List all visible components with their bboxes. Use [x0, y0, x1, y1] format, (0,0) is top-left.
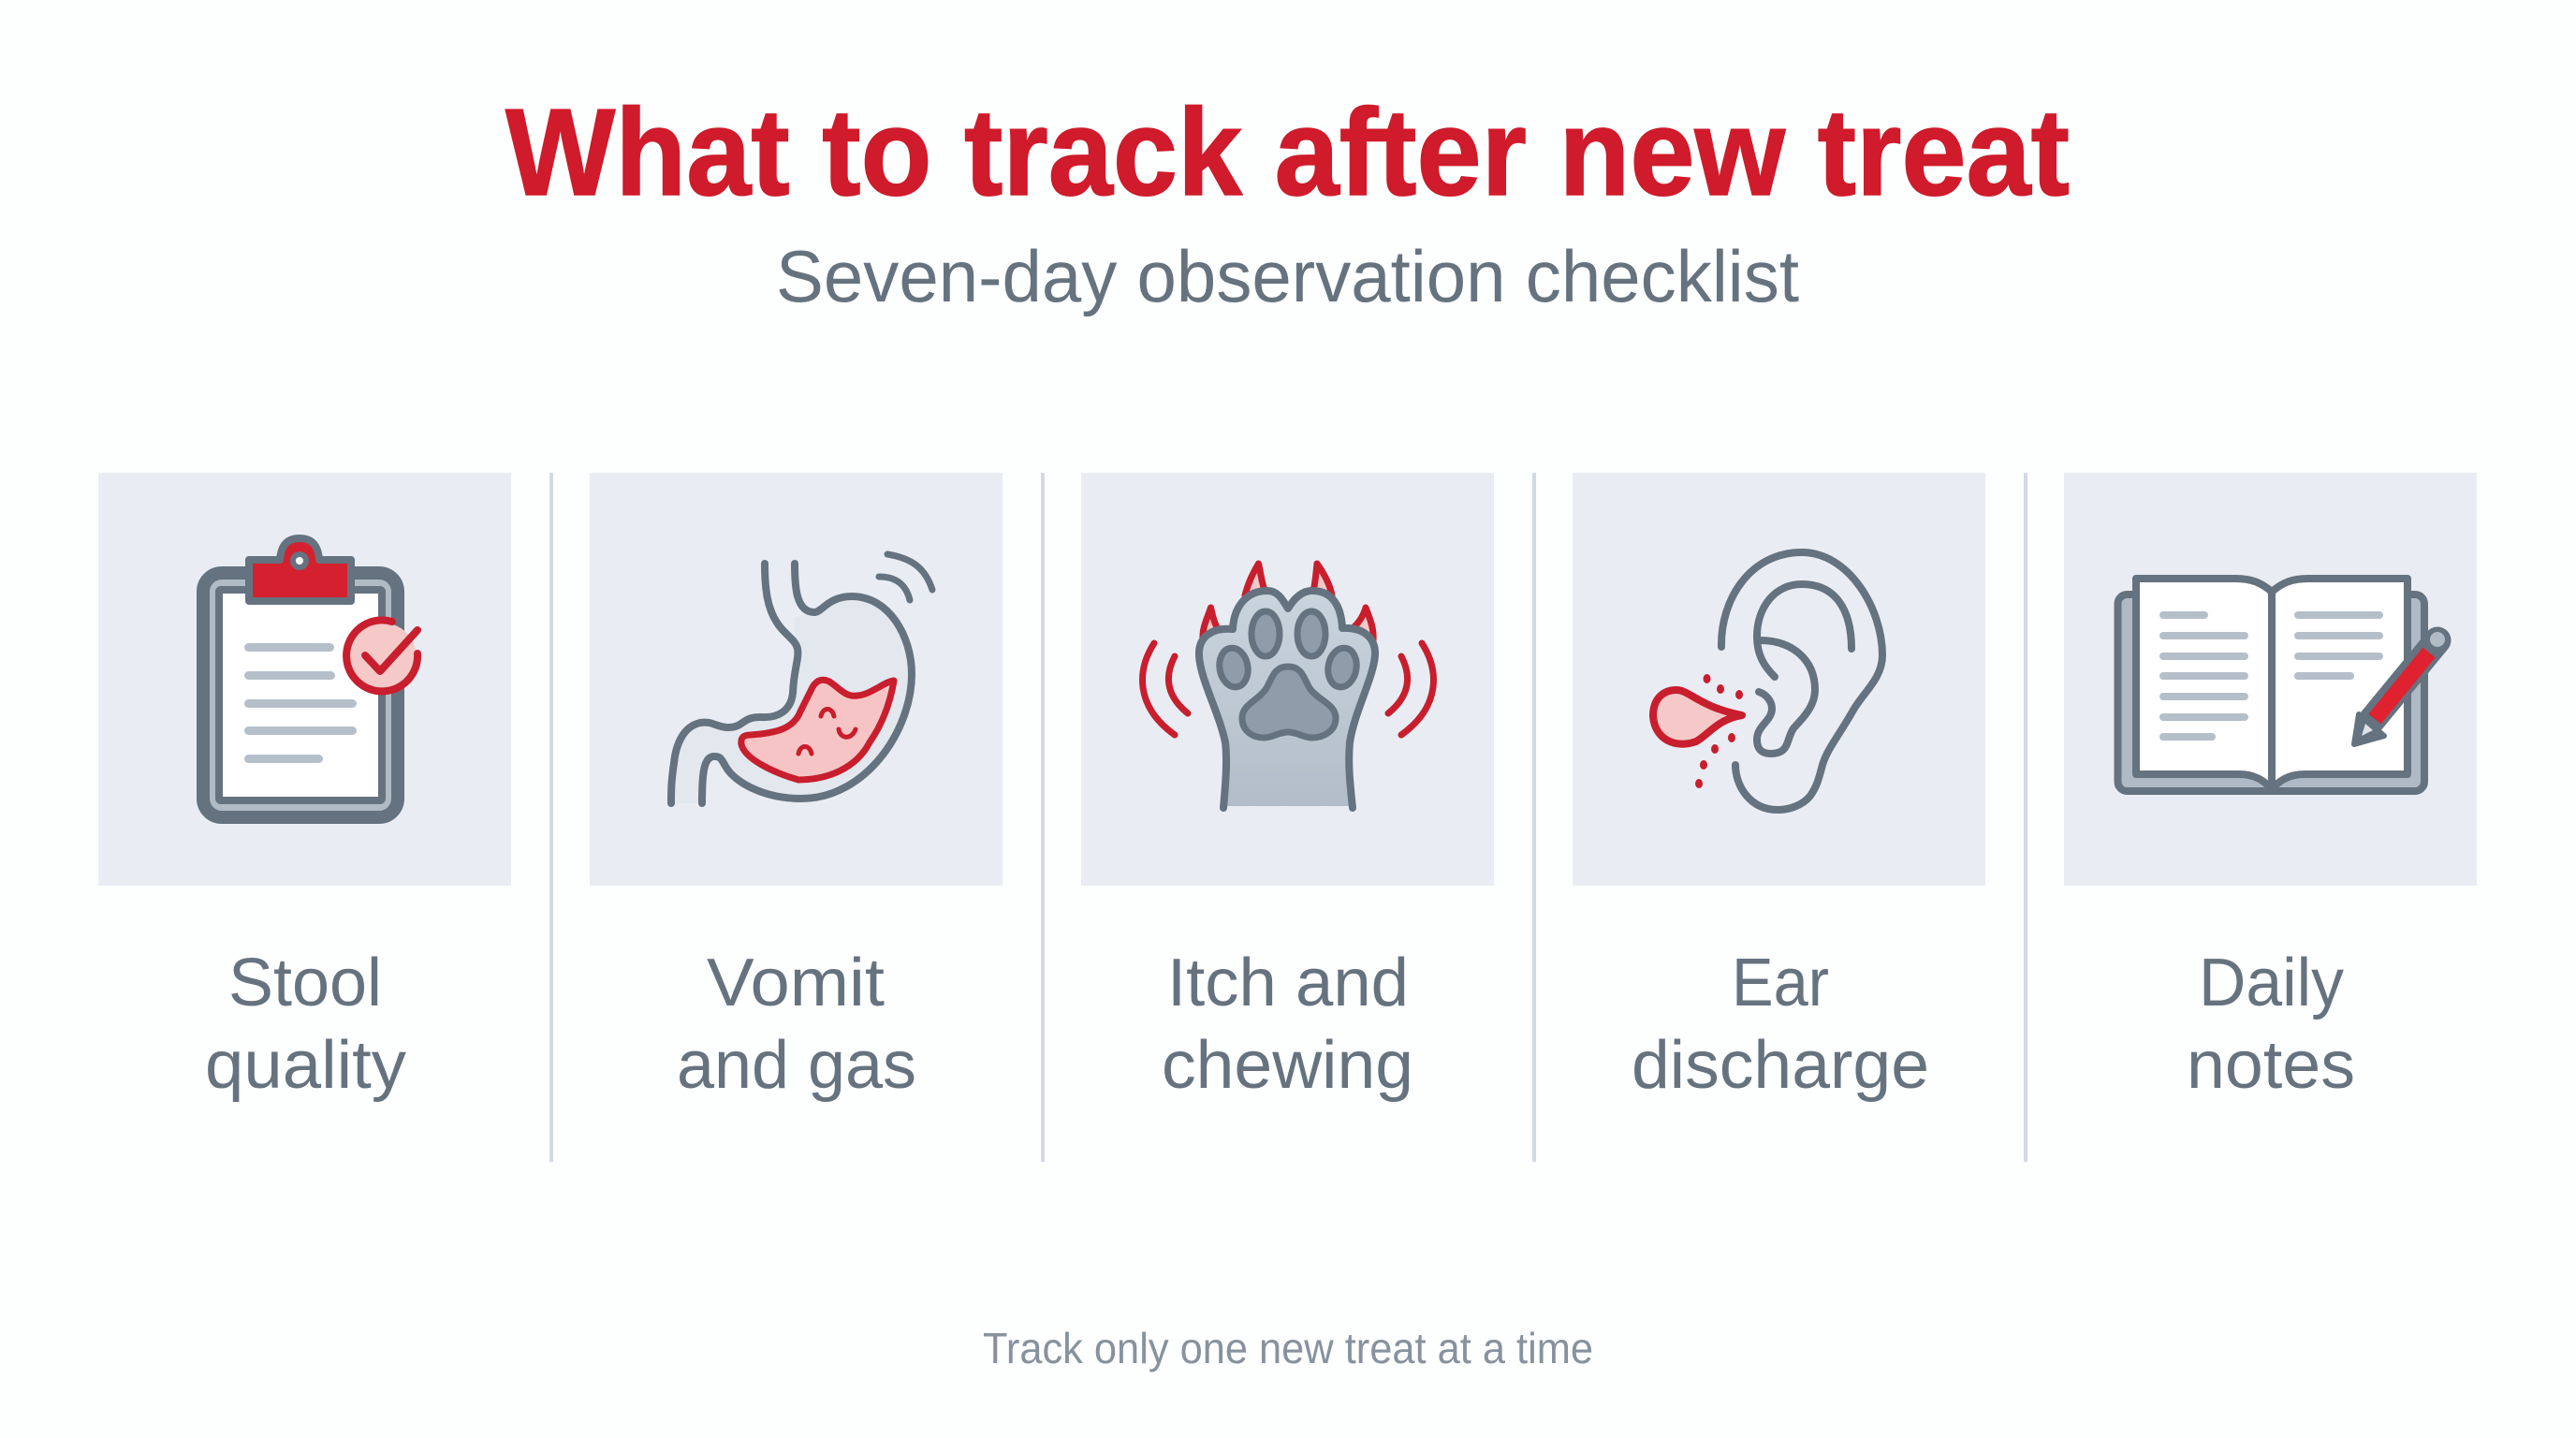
- label: ear discharge: [1632, 946, 1929, 1103]
- label: vomit and gas: Vomit: [707, 946, 885, 1020]
- label: vomit and gas: [677, 946, 916, 1103]
- subtitle: Seven-day observation checklist: [776, 235, 1799, 317]
- icon: clipboard with check: [203, 538, 417, 817]
- label: stool quality: [205, 946, 406, 1103]
- label: itch and chewing: [1162, 946, 1413, 1103]
- label: daily notes: notes: [2187, 1028, 2355, 1103]
- label: itch and chewing: Itch and: [1167, 946, 1409, 1020]
- icon tile: paw: [1081, 473, 1494, 886]
- label: daily notes: [2187, 946, 2355, 1103]
- title: What to track after new treat: [505, 83, 2070, 221]
- claws: [1203, 564, 1373, 640]
- icon tile: clipboard: [98, 473, 511, 886]
- pen: [2354, 632, 2445, 744]
- label: itch and chewing: chewing: [1162, 1028, 1413, 1103]
- icon tile: ear: [1573, 473, 1985, 886]
- panel: daily notes: [2064, 473, 2477, 1103]
- label: vomit and gas: and gas: [677, 1028, 916, 1103]
- label: ear discharge: Ear: [1732, 946, 1829, 1020]
- panel: vomit and gas: [590, 473, 1003, 1103]
- icon: scratching paw: [1143, 564, 1433, 808]
- icon: stomach with contents: [671, 554, 932, 803]
- scratch motion marks: [1143, 643, 1433, 735]
- panel: ear discharge: [1573, 473, 1985, 1103]
- panel: stool quality: [98, 473, 511, 1103]
- footer note: Track only one new treat at a time: [983, 1324, 1593, 1372]
- icon tile: notebook: [2064, 473, 2477, 886]
- label: stool quality: quality: [205, 1028, 406, 1103]
- icon: open book and pen: [2117, 579, 2445, 794]
- label: ear discharge: discharge: [1632, 1028, 1929, 1103]
- icon: ear with discharge: [1653, 552, 1882, 810]
- panel: itch and chewing: [1081, 473, 1494, 1103]
- label: daily notes: Daily: [2199, 946, 2344, 1020]
- icon tile: stomach: [590, 473, 1003, 886]
- label: stool quality: Stool: [228, 946, 382, 1020]
